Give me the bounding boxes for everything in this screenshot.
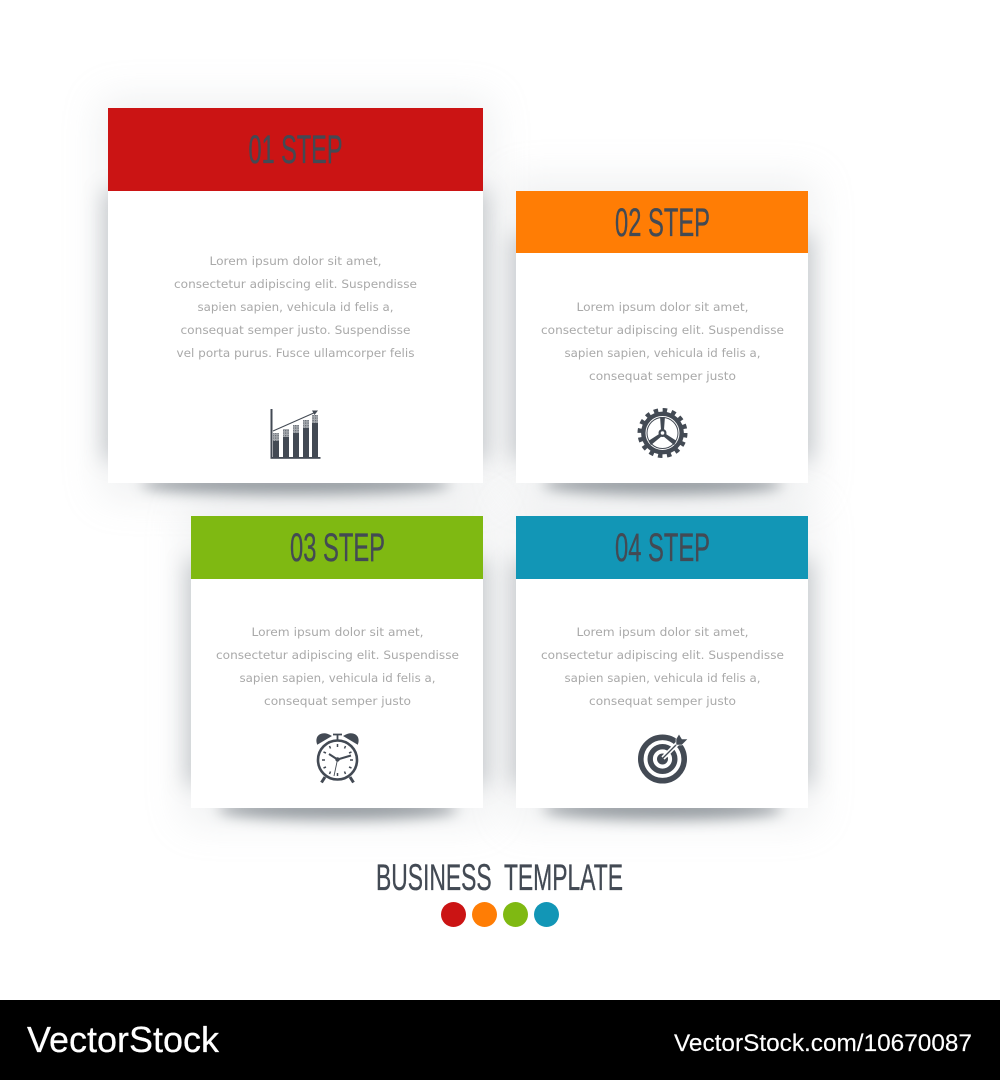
text block: step 3: consequat semper justo [264, 694, 411, 708]
text block: step 3: Lorem ipsum dolor sit amet, [252, 625, 424, 639]
footer url: VectorStock.com/10670087 [674, 1030, 972, 1057]
text block: step 2: consequat semper justo [589, 369, 736, 383]
text block: step 4: consequat semper justo [589, 694, 736, 708]
header band: step 4 [516, 516, 808, 579]
icon: target with arrow [641, 734, 688, 781]
header band: step 2 [516, 191, 808, 253]
footer bar [0, 1000, 1000, 1080]
legend dots [441, 902, 559, 927]
footer logo: VectorStock [27, 1019, 220, 1060]
text block: step 1 [174, 254, 417, 360]
text block: step 1: Lorem ipsum dolor sit amet, [210, 254, 382, 268]
text block: step 4: consectetur adipiscing elit. Suspendisse [541, 648, 784, 662]
text block: step 1: vel porta purus. Fusce ullamcorper felis [176, 346, 415, 360]
text block: step 2 [541, 300, 784, 383]
heading: 04 STEP: 04 STEP [615, 526, 710, 570]
text block: step 1: sapien sapien, vehicula id felis a, [198, 300, 394, 314]
shadow: card 3 [183, 503, 491, 823]
text block: step 3 [216, 625, 459, 708]
text block: step 2: Lorem ipsum dolor sit amet, [576, 300, 748, 314]
text block: step 1: consectetur adipiscing elit. Suspendisse [174, 277, 417, 291]
icon: gear [640, 410, 686, 456]
panel: step 3 [191, 516, 483, 808]
text block: step 3: consectetur adipiscing elit. Suspendisse [216, 648, 459, 662]
text block: step 2: consectetur adipiscing elit. Suspendisse [541, 323, 784, 337]
text block: step 2: sapien sapien, vehicula id felis a, [564, 346, 760, 360]
shadow: card 1 [100, 98, 492, 498]
header band: step 3 [191, 516, 483, 579]
shadow: card 2 [508, 178, 816, 498]
text block: step 4: Lorem ipsum dolor sit amet, [576, 625, 748, 639]
icon: alarm clock [317, 734, 358, 782]
text block: step 3: sapien sapien, vehicula id felis a, [240, 671, 436, 685]
panel: step 1 [108, 108, 483, 483]
heading: 03 STEP: 03 STEP [290, 526, 385, 570]
heading: 01 STEP: 01 STEP [248, 128, 342, 172]
shadow: card 4 [508, 503, 816, 823]
text block: step 1: consequat semper justo. Suspendisse [180, 323, 410, 337]
text block: step 4: sapien sapien, vehicula id felis a, [564, 671, 760, 685]
text block: step 4 [541, 625, 784, 708]
panel: step 2 [516, 191, 808, 483]
icon: bar chart [270, 409, 320, 459]
panel: step 4 [516, 516, 808, 808]
heading: 02 STEP: 02 STEP [615, 201, 710, 245]
header band: step 1 [108, 108, 483, 191]
title: BUSINESS TEMPLATE [376, 857, 623, 898]
